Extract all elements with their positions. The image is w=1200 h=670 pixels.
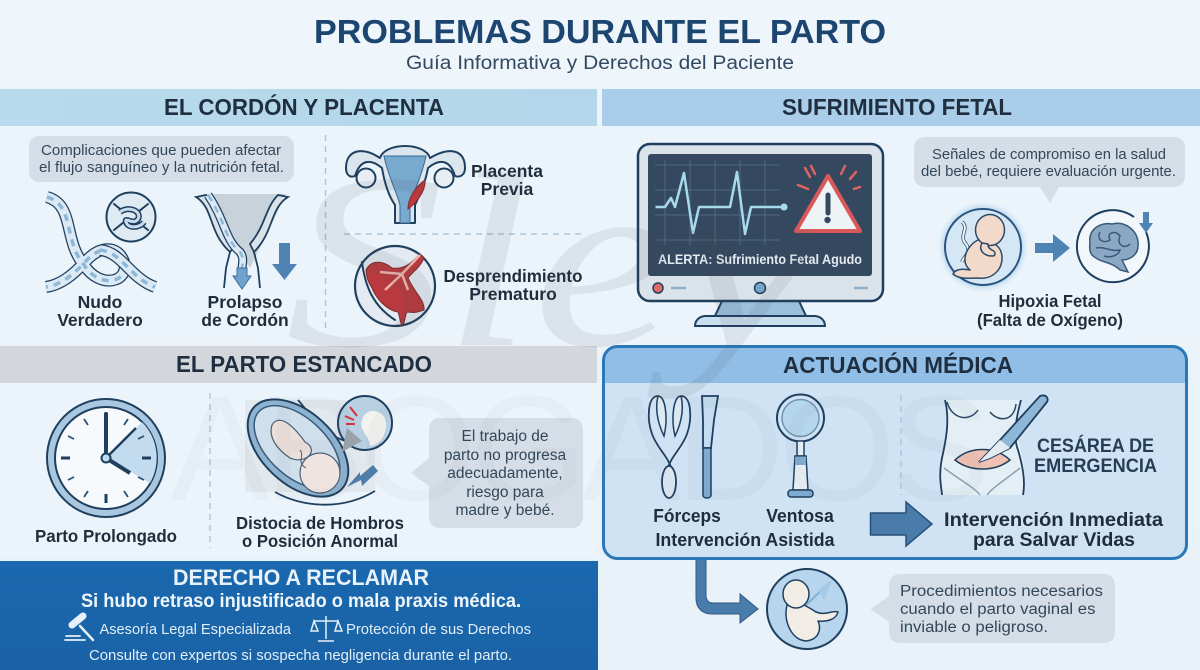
label: prolapso de cordón: de Cordón [201, 310, 289, 330]
panel: el parto estancado [0, 346, 597, 555]
label: cesárea de emergencia: CESÁREA DE [1037, 434, 1154, 457]
callout: el trabajo de parto: adecuadamente, [447, 465, 563, 482]
panel: actuación médica [604, 346, 1186, 558]
text: consulte: Consulte con expertos si sospecha negligencia durante el parto. [89, 647, 512, 664]
icon: mazo [65, 616, 93, 640]
icon: alerta triángulo [796, 166, 860, 231]
icon: ventosa [777, 394, 824, 497]
alert text: ALERTA: Sufrimiento Fetal Agudo [658, 252, 862, 267]
heading: el parto estancado: EL PARTO ESTANCADO [176, 351, 432, 377]
icon: distocia de hombros [230, 381, 392, 515]
arrow: hacia procedimientos [696, 558, 758, 623]
label: prolapso de cordón [201, 292, 289, 330]
label: desprendimiento prematuro [444, 266, 582, 304]
label: placenta previa [471, 161, 543, 199]
callout: procedimientos necesarios: Procedimientos necesarios [900, 583, 1103, 600]
callout: señales de compromiso: del bebé, requiere evaluación urgente. [921, 163, 1176, 180]
label: intervención inmediata [944, 509, 1163, 551]
heading: actuación médica: ACTUACIÓN MÉDICA [783, 351, 1013, 378]
label: desprendimiento prematuro: Desprendimiento [444, 266, 582, 286]
label: distocia de hombros: o Posición Anormal [242, 531, 398, 551]
divider [326, 135, 582, 330]
icon: cesárea [940, 395, 1048, 495]
divider [209, 393, 211, 548]
icon: desprendimiento [355, 246, 435, 326]
label: placenta previa: Placenta [471, 161, 543, 181]
watermark: abogados: ABOGADOS [170, 364, 990, 532]
label: nudo verdadero [57, 292, 143, 330]
arrow: hipoxia [1035, 234, 1070, 262]
label: cesárea de emergencia: EMERGENCIA [1034, 455, 1157, 477]
callout: complicaciones: el flujo sanguíneo y la nutrición fetal. [39, 159, 284, 176]
callout: procedimientos necesarios: cuando el parto vaginal es [900, 601, 1096, 618]
label: fórceps y ventosa [653, 505, 835, 550]
callout: el trabajo de parto: El trabajo de [461, 428, 549, 445]
icon: balanza [311, 616, 342, 641]
callout: complicaciones [29, 136, 294, 182]
callout: señales de compromiso: Señales de compromiso en la salud [932, 146, 1166, 163]
heading: derecho a reclamar: DERECHO A RECLAMAR [173, 565, 429, 590]
icon: cerebro [1077, 210, 1153, 282]
subtitle: Guía Informativa y Derechos del Paciente [406, 53, 794, 74]
subheading: Si hubo retraso injustificado o mala praxis médica. [81, 591, 521, 612]
label: cesárea de emergencia [1034, 434, 1157, 477]
callout: complicaciones: Complicaciones que pueden afectar [41, 142, 281, 159]
watermark: firma: Sley [285, 123, 816, 400]
label: distocia de hombros [236, 513, 404, 551]
label: prolapso de cordón: Prolapso [208, 292, 282, 312]
callout: procedimientos necesarios [870, 574, 1115, 643]
label: intervención inmediata: para Salvar Vidas [973, 529, 1135, 551]
label: desprendimiento prematuro: Prematuro [469, 284, 557, 304]
callout: el trabajo de parto: madre y bebé. [455, 502, 555, 519]
icon: monitor fetal [638, 144, 883, 326]
label: fórceps y ventosa: Ventosa [766, 505, 834, 526]
label: hipoxia fetal: Hipoxia Fetal [998, 291, 1102, 311]
label: intervención inmediata: Intervención Inmediata [944, 509, 1163, 531]
label: placenta previa: Previa [481, 179, 534, 199]
label: parto prolongado: Parto Prolongado [35, 526, 177, 546]
panel: sufrimiento fetal [602, 89, 1200, 340]
text: asesoría legal: Asesoría Legal Especializada [100, 621, 292, 638]
callout: el trabajo de parto [411, 418, 583, 528]
label: fórceps y ventosa: Fórceps [653, 505, 721, 526]
icon: nudo verdadero [46, 192, 156, 287]
heading: sufrimiento fetal: SUFRIMIENTO FETAL [782, 94, 1012, 120]
icon: feto procedimiento [767, 569, 847, 649]
arrow: hacia intervención inmediata [870, 502, 932, 546]
callout: señales de compromiso [914, 137, 1185, 203]
divider [900, 395, 902, 495]
title: PROBLEMAS DURANTE EL PARTO [314, 13, 886, 50]
callout: el trabajo de parto: riesgo para [466, 484, 544, 501]
label: hipoxia fetal [977, 291, 1123, 330]
text: protección: Protección de sus Derechos [346, 621, 531, 638]
label: distocia de hombros: Distocia de Hombros [236, 513, 404, 533]
icon: feto en círculo [936, 200, 1030, 294]
icon: prolapso de cordón [196, 194, 297, 289]
callout: procedimientos necesarios: inviable o peligroso. [900, 619, 1048, 636]
label: nudo verdadero: Verdadero [57, 310, 143, 330]
heading: el cordón y placenta: EL CORDÓN Y PLACENTA [164, 93, 444, 120]
callout: el trabajo de parto: parto no progresa [444, 447, 567, 464]
chart: ecg trace [656, 172, 788, 234]
panel: el cordón y placenta [0, 89, 597, 340]
icon: fórceps [649, 396, 718, 498]
label: hipoxia fetal: (Falta de Oxígeno) [977, 310, 1123, 330]
icon: reloj [47, 399, 165, 517]
panel: derecho a reclamar [0, 561, 598, 670]
label: fórceps y ventosa: Intervención Asistida [656, 529, 835, 550]
icon: placenta previa útero [346, 146, 465, 223]
label: nudo verdadero: Nudo [78, 292, 122, 312]
